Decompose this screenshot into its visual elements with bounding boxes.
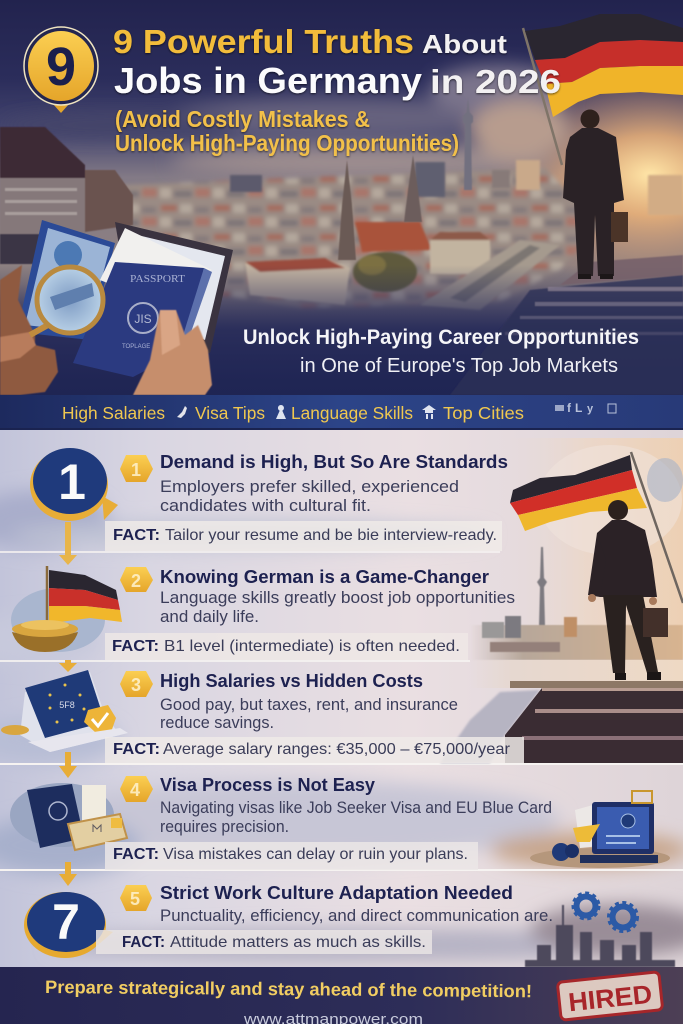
fact 1: FACT: — [113, 527, 160, 544]
fact 3: Average salary ranges: €35,000 – €75,000/year — [163, 741, 511, 758]
hero tagline: Unlock High-Paying Career Opportunities — [243, 326, 639, 349]
heading 2: Knowing German is a Game-Changer — [160, 566, 489, 587]
topics band: Top Cities — [443, 403, 524, 423]
icon: number 9 pin badge: 9 — [46, 37, 76, 97]
icon: number 7 badge: 7 — [52, 894, 80, 950]
heading 1: Demand is High, But So Are Standards — [160, 451, 508, 472]
icon: number 1 badge — [30, 448, 118, 521]
fact 4: FACT: — [113, 846, 159, 863]
marker 5: 5 — [130, 889, 140, 909]
icon: EU card with check — [1, 670, 128, 752]
marker 1 — [120, 455, 153, 482]
marker 3 — [120, 671, 153, 697]
body 2 — [160, 589, 515, 626]
subheading: (Avoid Costly Mistakes & — [115, 106, 370, 132]
marker 5 — [120, 885, 152, 911]
fact 3: FACT: — [113, 741, 160, 758]
body 4: requires precision. — [160, 818, 289, 836]
step 4 — [10, 774, 670, 870]
body 2: and daily life. — [160, 608, 259, 626]
documents: passport and magnifier: TOPLAGE — [122, 344, 150, 350]
body 4: Navigating visas like Job Seeker Visa and EU Blue Card — [160, 799, 552, 817]
arrow 3 to 4 — [59, 752, 77, 778]
body 1: Employers prefer skilled, experienced — [160, 478, 459, 496]
marker 2 — [120, 567, 153, 592]
hero photo background — [0, 0, 683, 395]
hero tagline — [243, 326, 639, 377]
heading line 2: in 2026 — [430, 63, 561, 100]
step 2 — [11, 566, 515, 660]
fact 3 — [105, 737, 524, 763]
fact 4: Visa mistakes can delay or ruin your plans. — [163, 846, 468, 863]
stamp: hired — [557, 972, 663, 1020]
icon: passport and envelope — [10, 783, 127, 850]
body 3: reduce savings. — [160, 714, 274, 732]
step 1 — [30, 448, 508, 551]
distant skyline — [470, 547, 683, 660]
subheading — [115, 106, 459, 156]
step 5 — [24, 882, 675, 967]
documents: passport and magnifier — [0, 220, 233, 395]
icon: person — [276, 405, 286, 419]
fact 4 — [105, 842, 478, 870]
icon: laptop with documents — [530, 791, 670, 868]
fact 5 — [96, 930, 432, 954]
marker 1: 1 — [131, 460, 141, 480]
icon: flag with coins — [11, 566, 122, 652]
body 3 — [160, 696, 458, 732]
heading line 1: About — [422, 29, 507, 59]
call to action: Prepare strategically and stay ahead of the competition! — [45, 977, 532, 1001]
icon: EU card with check: 5F8 — [59, 700, 75, 710]
title block — [24, 23, 561, 156]
man — [588, 500, 668, 680]
hero tagline: in One of Europe's Top Job Markets — [300, 355, 618, 377]
fact 5: Attitude matters as much as skills. — [170, 934, 426, 951]
stamp: hired: HIRED — [567, 979, 654, 1017]
topics band: Visa Tips — [195, 403, 265, 423]
topics band: High Salaries — [62, 403, 165, 423]
heading 4: Visa Process is Not Easy — [160, 774, 376, 795]
arrow 2 to 3 — [59, 660, 77, 672]
marker 2: 2 — [131, 571, 141, 591]
right scene: city, stairs, man and flag — [440, 452, 683, 763]
step 3 — [1, 670, 524, 763]
icon: visa — [177, 406, 187, 418]
icon: number 9 pin badge — [24, 27, 98, 113]
body 5: Punctuality, efficiency, and direct communication are. — [160, 907, 553, 925]
body 2: Language skills greatly boost job opportunities — [160, 589, 515, 607]
heading line 2 — [114, 60, 561, 101]
stairs hero — [450, 255, 683, 395]
icon: gears and skyline — [525, 893, 675, 967]
icon: number 7 badge — [24, 892, 113, 958]
arrow 1 to 2 — [59, 522, 77, 565]
topics band: Language Skills — [291, 403, 413, 423]
social icons — [555, 401, 616, 415]
fact 2: FACT: — [112, 638, 159, 655]
documents: passport and magnifier: JIS — [134, 312, 152, 326]
social icons: y — [587, 403, 594, 415]
fact 2: B1 level (intermediate) is often needed. — [164, 638, 460, 655]
body 1 — [160, 478, 459, 515]
icon: city — [422, 405, 436, 419]
subheading: Unlock High-Paying Opportunities) — [115, 130, 459, 156]
topics band — [0, 395, 683, 430]
marker 4: 4 — [130, 780, 140, 800]
stairs — [505, 681, 683, 763]
arrow 4 to 5 — [59, 862, 77, 886]
body 4 — [160, 799, 552, 836]
icon: number 1 badge: 1 — [58, 454, 86, 510]
magnifier — [30, 267, 103, 335]
fact 5: FACT: — [122, 934, 165, 951]
marker 3: 3 — [131, 675, 141, 695]
footer band — [0, 967, 683, 1024]
flag hero — [523, 14, 683, 165]
steps area background — [0, 430, 683, 967]
fact 2 — [105, 633, 468, 660]
man hero — [563, 110, 628, 279]
right hand — [133, 310, 212, 395]
flag — [510, 452, 683, 603]
heading 3: High Salaries vs Hidden Costs — [160, 670, 423, 691]
social icons: f — [567, 401, 572, 415]
social icons: L — [575, 401, 582, 415]
marker 4 — [120, 776, 153, 802]
left hand — [0, 265, 58, 395]
church spires and tv tower — [338, 98, 473, 260]
heading line 1: 9 Powerful Truths — [113, 23, 414, 60]
heading 5: Strict Work Culture Adaptation Needed — [160, 882, 513, 903]
body 3: Good pay, but taxes, rent, and insurance — [160, 696, 458, 714]
city skyline — [120, 160, 683, 310]
heading line 2: Jobs in Germany — [114, 60, 422, 101]
lower hero fade — [0, 265, 683, 395]
body 1: candidates with cultural fit. — [160, 497, 371, 515]
fact 1: Tailor your resume and be bie interview-ready. — [165, 527, 497, 544]
documents: passport and magnifier: PASSPORT — [130, 273, 185, 285]
fact 1 — [105, 521, 502, 551]
old building left — [0, 127, 133, 264]
